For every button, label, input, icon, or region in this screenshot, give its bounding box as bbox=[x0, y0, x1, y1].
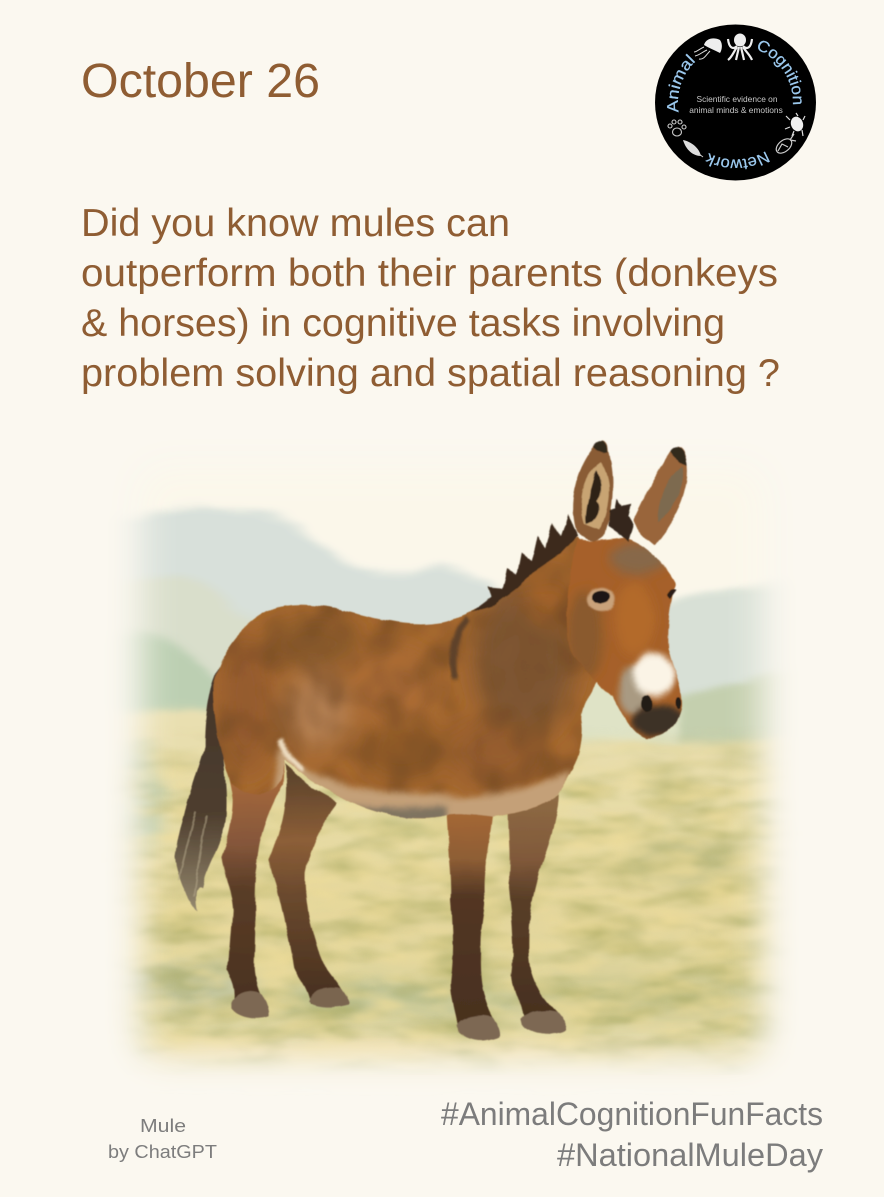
image credit bbox=[108, 1115, 217, 1162]
flank highlight bbox=[280, 739, 303, 769]
near ear bbox=[573, 442, 612, 541]
hashtags: #NationalMuleDay bbox=[557, 1137, 823, 1173]
image credit: by ChatGPT bbox=[108, 1141, 217, 1162]
far ear bbox=[633, 447, 688, 546]
near hind hoof bbox=[231, 991, 269, 1018]
question headline: & horses) in cognitive tasks involving bbox=[81, 302, 725, 345]
icon: paw bbox=[668, 120, 686, 136]
logo tagline bbox=[689, 94, 783, 115]
icon: jellyfish bbox=[694, 38, 722, 59]
body and neck bbox=[214, 536, 599, 818]
logo ring text: Cognition bbox=[758, 40, 802, 104]
far ear inner bbox=[658, 466, 684, 522]
head bbox=[567, 538, 682, 738]
hashtags: #AnimalCognitionFunFacts bbox=[441, 1096, 823, 1132]
logo ring text: Animal bbox=[666, 54, 696, 112]
illustration: watercolor landscape bbox=[118, 504, 786, 1076]
hashtags bbox=[441, 1096, 823, 1173]
question headline: Did you know mules can bbox=[81, 202, 510, 245]
nostrils bbox=[641, 696, 652, 712]
meadow mottling bbox=[133, 738, 774, 1068]
meadow washes bbox=[107, 745, 760, 1064]
near ear inner bbox=[582, 462, 608, 530]
far hind leg bbox=[269, 763, 349, 1004]
near front hoof bbox=[457, 1015, 500, 1041]
mane bbox=[471, 515, 578, 613]
icon: feather bbox=[683, 140, 703, 157]
shoulder crease bbox=[453, 619, 467, 679]
near front leg bbox=[446, 791, 497, 1026]
forelock bbox=[608, 498, 633, 542]
right hills bbox=[668, 585, 774, 699]
far hind hoof bbox=[308, 987, 349, 1007]
question headline: outperform both their parents (donkeys bbox=[81, 252, 778, 295]
logo tagline: animal minds & emotions bbox=[689, 105, 783, 115]
image credit: Mule bbox=[140, 1115, 186, 1136]
logo ring text: Network bbox=[705, 152, 770, 170]
eye bbox=[588, 587, 616, 612]
belly light band bbox=[270, 747, 572, 818]
meadow bbox=[121, 706, 783, 1074]
hills behind the chest bbox=[581, 682, 682, 745]
far front hoof bbox=[520, 1010, 567, 1034]
logo tagline: Scientific evidence on bbox=[696, 94, 778, 104]
tail bbox=[175, 667, 227, 912]
far front leg bbox=[508, 793, 559, 1020]
muzzle grey bbox=[618, 667, 648, 715]
meadow highlights bbox=[133, 753, 766, 1058]
logo ring text bbox=[666, 40, 802, 170]
body shading bbox=[215, 537, 588, 819]
head shading bbox=[567, 543, 685, 737]
logo: Animal Cognition Network bbox=[655, 24, 816, 180]
icon: beetle bbox=[785, 113, 805, 136]
far mountains bbox=[130, 504, 498, 625]
illustration: mule bbox=[175, 442, 688, 1041]
near hind leg bbox=[217, 735, 285, 1002]
question headline bbox=[81, 202, 780, 395]
belly shadow bbox=[354, 802, 450, 819]
far ear tip bbox=[671, 447, 688, 466]
date heading: October 26 bbox=[81, 55, 320, 108]
near ear dark hairs bbox=[586, 470, 601, 524]
muzzle white blaze bbox=[633, 653, 676, 697]
fur mottling bbox=[216, 537, 585, 796]
mid hills bbox=[144, 576, 252, 676]
meadow texture bbox=[132, 738, 774, 1068]
near ear tip bbox=[594, 442, 608, 453]
icon: fish bbox=[774, 134, 796, 156]
question headline: problem solving and spatial reasoning ? bbox=[81, 352, 780, 395]
far eye bbox=[667, 589, 677, 599]
muzzle dark bbox=[631, 705, 685, 737]
icon: octopus bbox=[728, 34, 752, 60]
